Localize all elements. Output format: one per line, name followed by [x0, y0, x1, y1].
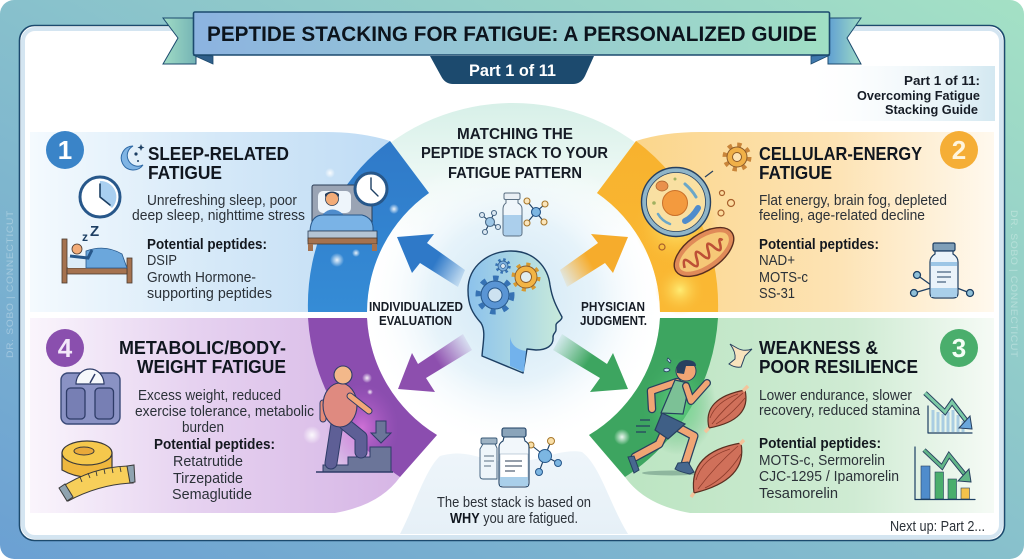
panel 1 peptides: supporting peptides	[147, 286, 272, 302]
panel 2 arc band	[597, 141, 718, 312]
panel 3 peptides: MOTS-c, Sermorelin	[759, 453, 885, 469]
panel 3 heading: POOR RESILIENCE	[759, 357, 918, 377]
icon: scale	[61, 369, 120, 424]
center bottom caption: WHY you are fatigued.	[450, 511, 578, 527]
panel 3 description: recovery, reduced stamina	[759, 403, 921, 419]
panel 3 peptides: Tesamorelin	[759, 486, 838, 502]
top-right note: Stacking Guide	[885, 102, 978, 117]
panel 1 peptides: Growth Hormone-	[147, 270, 256, 286]
panel 1 heading: SLEEP-RELATED	[148, 144, 289, 164]
center circle background	[304, 103, 722, 534]
panel 1: sleep-related fatigue	[30, 131, 429, 312]
panel 1 peptides: DSIP	[147, 253, 177, 269]
panel 3 heading: WEAKNESS &	[759, 338, 878, 358]
icon: person climbing stairs	[316, 366, 393, 472]
panel 1 heading: FATIGUE	[148, 163, 222, 183]
number 2 badge	[940, 131, 978, 169]
icon: person sleeping in bed: z	[82, 230, 88, 244]
icon: runner	[628, 358, 707, 476]
panel 4 description	[135, 388, 314, 436]
panel 2 peptides: SS-31	[759, 286, 795, 302]
chart: declining line	[925, 393, 972, 433]
panel 4 peptides	[154, 437, 275, 503]
icon: center vial with molecules	[480, 193, 548, 236]
panel 1 heading	[148, 144, 289, 183]
center bottom caption: The best stack is based on	[437, 495, 591, 511]
panel 1 description: Unrefreshing sleep, poor	[147, 193, 297, 209]
icon: person sleeping in bed	[62, 223, 132, 283]
top-right note: Overcoming Fatigue	[857, 88, 980, 103]
panel 4 peptides: Retatrutide	[173, 454, 243, 470]
panel 2 heading: FATIGUE	[759, 163, 832, 183]
panel 1 description: deep sleep, nighttime stress	[132, 208, 305, 224]
panel 2 description	[759, 193, 947, 224]
icon: gear	[725, 145, 749, 169]
panel 3 peptides: CJC-1295 / Ipamorelin	[759, 469, 899, 485]
panel 3 description	[759, 388, 921, 419]
panel 2 description: feeling, age-related decline	[759, 208, 925, 224]
panel 4 heading: WEIGHT FATIGUE	[137, 357, 286, 377]
panel 4 description: burden	[182, 420, 224, 436]
chart: declining bars	[915, 447, 975, 500]
icon: cell	[642, 168, 734, 250]
panel 1 description	[132, 193, 305, 224]
number 3 badge: 3	[952, 333, 966, 363]
panel 2 peptides: Potential peptides:	[759, 237, 879, 253]
number 1 badge: 1	[58, 135, 72, 165]
icon: mitochondrion	[666, 218, 742, 286]
center bottom caption	[437, 495, 591, 527]
panel 1 background	[30, 132, 429, 312]
panel 3 description: Lower endurance, slower	[759, 388, 912, 404]
label: physician judgment	[580, 299, 647, 328]
panel 3 peptides: Potential peptides:	[759, 436, 881, 452]
icon: bottom vials with molecule	[480, 428, 562, 487]
panel 2: cellular-energy fatigue	[597, 131, 994, 315]
label: physician judgment: JUDGMENT.	[580, 313, 647, 328]
panel 3 peptides	[759, 436, 899, 502]
icon: measuring tape	[59, 441, 135, 501]
top-right note: Part 1 of 11:	[904, 73, 980, 88]
center heading: FATIGUE PATTERN	[448, 165, 582, 182]
panel 2 heading	[759, 144, 922, 183]
panel 4 peptides: Semaglutide	[172, 487, 252, 503]
panel 4 background	[30, 318, 437, 513]
label: individualized evaluation: INDIVIDUALIZED	[369, 299, 463, 314]
panel 4 heading	[119, 338, 286, 377]
icon: flexed arm	[729, 344, 752, 367]
panel 4 peptides: Potential peptides:	[154, 437, 275, 453]
panel 4 description: Excess weight, reduced	[138, 388, 281, 404]
panel 2 peptides: NAD+	[759, 253, 795, 269]
label: individualized evaluation	[369, 299, 463, 328]
label: physician judgment: PHYSICIAN	[581, 299, 645, 314]
panel 4 peptides: Tirzepatide	[173, 471, 243, 487]
panel 1 peptides: Potential peptides:	[147, 237, 267, 253]
panel 1 arc band	[308, 141, 429, 312]
icon: person in bed with clock	[308, 173, 387, 251]
icon: vial with molecule	[910, 243, 974, 298]
number 1 badge	[46, 131, 84, 169]
icon: muscle upper	[705, 386, 748, 432]
panel 1 peptides	[147, 237, 272, 302]
panel 4 arc band	[308, 318, 437, 477]
arrow: to cellular panel	[560, 234, 628, 287]
title ribbon	[163, 12, 861, 64]
panel 3: weakness and poor resilience	[589, 318, 994, 513]
icon: moon and stars	[121, 144, 144, 170]
number 4 badge: 4	[58, 333, 73, 363]
icon: muscle lower	[691, 440, 744, 497]
next up note: Next up: Part 2...	[890, 519, 985, 535]
number 3 badge	[940, 329, 978, 367]
number 4 badge	[46, 329, 84, 367]
panel 2 description: Flat energy, brain fog, depleted	[759, 193, 947, 209]
icon: person sleeping in bed: Z	[90, 223, 99, 240]
ribbon left tail	[163, 18, 213, 64]
panel 4: metabolic/body-weight fatigue	[30, 318, 437, 513]
label: individualized evaluation: EVALUATION	[379, 313, 452, 328]
number 2 badge: 2	[952, 135, 966, 165]
icon: head with gears	[468, 251, 562, 373]
center heading: PEPTIDE STACK TO YOUR	[421, 145, 608, 162]
ribbon right tail	[811, 18, 861, 64]
side watermark right: DR. SOBO | CONNECTICUT	[1008, 210, 1019, 358]
panel 2 heading: CELLULAR-ENERGY	[759, 144, 922, 164]
icon: clock	[80, 177, 120, 217]
ribbon body	[194, 12, 830, 55]
top-right note	[800, 66, 995, 121]
arrow: to metabolic panel	[398, 334, 472, 392]
panel 2 peptides	[759, 237, 879, 302]
part tab	[430, 56, 594, 84]
panel 4 description: exercise tolerance, metabolic	[135, 404, 314, 420]
panel 3 heading	[759, 338, 918, 377]
panel 2 background	[597, 132, 994, 312]
center heading	[421, 126, 608, 182]
part tab: Part 1 of 11	[469, 61, 556, 80]
arrow: to weakness panel	[553, 334, 628, 392]
panel 4 heading: METABOLIC/BODY-	[119, 338, 286, 358]
panel 3 background	[589, 318, 994, 513]
panel 3 arc band	[589, 318, 718, 477]
side watermark left: DR. SOBO | CONNECTICUT	[5, 210, 16, 358]
center heading: MATCHING THE	[457, 126, 573, 143]
title: PEPTIDE STACKING FOR FATIGUE: A PERSONALIZED GUIDE	[207, 23, 817, 46]
panel 2 peptides: MOTS-c	[759, 270, 808, 286]
arrow: to sleep panel	[397, 234, 465, 287]
